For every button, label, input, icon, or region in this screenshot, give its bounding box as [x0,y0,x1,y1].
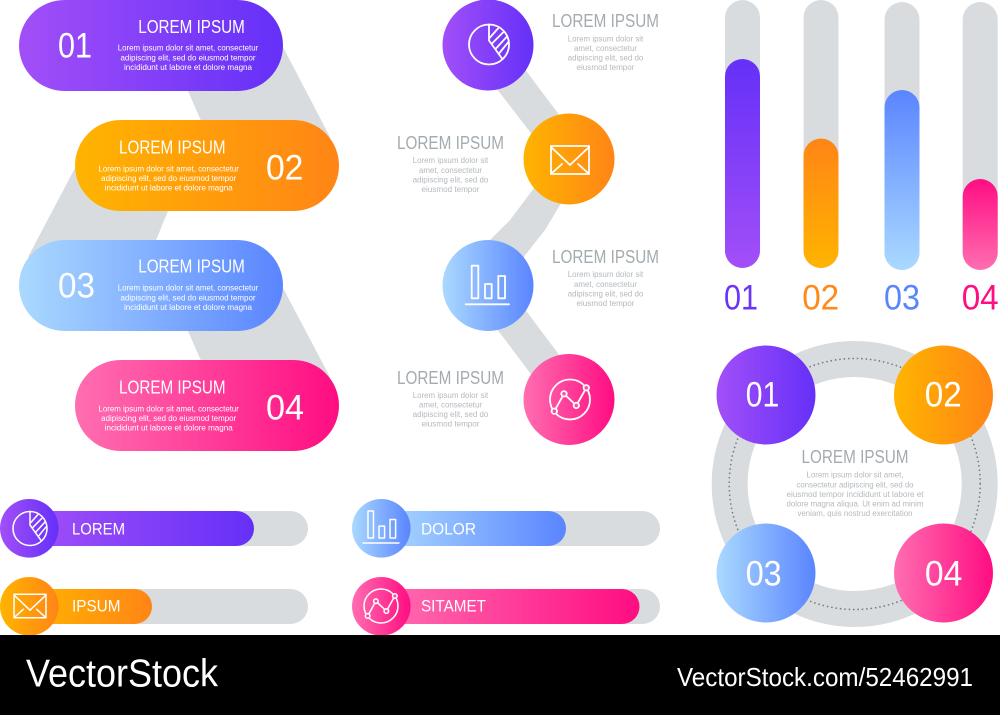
step 1 with pie icon: adipiscing elit, sed do [568,54,644,62]
progress bar DOLOR [352,499,660,558]
node 01: 01 [746,376,779,415]
panel: horizontal progress bars [0,499,660,636]
pill 02: adipiscing elit, sed do eiusmod tempor [101,174,237,183]
panel: circular cycle diagram [716,346,993,622]
step 2 with envelope icon: Lorem ipsum dolor sit [413,156,489,165]
step 4 with line chart icon [397,354,614,445]
bar 01: 01 [724,278,758,317]
pill 03 [19,240,283,331]
centre text: eiusmod tempor incididunt ut labore et [786,490,924,499]
progress bar DOLOR: DOLOR [421,520,476,538]
pill 01: adipiscing elit, sed do eiusmod tempor [120,53,256,62]
progress bar SITAMET: SITAMET [421,596,486,616]
footer band: VectorStock [26,653,218,696]
pill 01: incididunt ut labore et dolore magna [124,63,253,72]
step 1 with pie icon: Lorem ipsum dolor sit [568,34,644,44]
pill 04: incididunt ut labore et dolore magna [105,424,233,433]
bar 03 [884,2,920,317]
pill 03: LOREM IPSUM [138,256,245,276]
node 03: 03 [746,555,782,594]
centre text: dolore magna aliqua. Ut enim ad minim [786,500,924,508]
pill 02: Lorem ipsum dolor sit amet, consectetur [98,164,239,173]
step 3 with bar chart icon: eiusmod tempor [576,299,635,308]
step 3 with bar chart icon: LOREM IPSUM [552,247,659,267]
centre text: LOREM IPSUM [802,447,908,467]
node 02 [894,346,993,444]
pill 02: LOREM IPSUM [119,137,226,157]
pill 04: adipiscing elit, sed do eiusmod tempor [101,414,237,423]
step 2 with envelope icon [397,114,614,204]
centre text: veniam, quis nostrud exercitation [798,509,912,518]
footer band [0,635,1000,715]
grey ring [730,359,980,609]
grey zigzag connector [470,50,575,390]
step 2 with envelope icon: eiusmod tempor [422,185,480,194]
step 3 with bar chart icon [442,240,659,331]
progress bar LOREM [0,499,308,558]
pill 01: Lorem ipsum dolor sit amet, consectetur [118,44,259,53]
centre text: consectetur adipiscing elit, sed do [796,480,914,489]
centre text [786,447,924,518]
pill 01: 01 [58,26,92,66]
node 03 [716,524,816,622]
node 04: 04 [925,555,962,594]
step 4 with line chart icon: Lorem ipsum dolor sit [413,391,489,400]
bar 02 [802,0,839,317]
node 02: 02 [925,376,962,415]
pill 02 [75,120,339,211]
step 3 with bar chart icon: Lorem ipsum dolor sit [568,270,644,279]
bar 01 [724,0,760,317]
step 4 with line chart icon: amet, consectetur [419,400,482,410]
panel: vertical bar chart [724,0,999,317]
node 01 [716,346,816,444]
pill 01: LOREM IPSUM [138,17,245,37]
pill 03: Lorem ipsum dolor sit amet, consectetur [118,284,259,293]
step 1 with pie icon [442,0,659,90]
bar 02: 02 [802,278,839,317]
step 2 with envelope icon: amet, consectetur [419,166,482,175]
pill 02: 02 [266,148,303,187]
step 1 with pie icon: eiusmod tempor [576,63,635,72]
pill 03: adipiscing elit, sed do eiusmod tempor [120,293,256,302]
progress bar SITAMET [352,577,660,636]
footer band: VectorStock.com/52462991 [677,662,973,692]
step 3 with bar chart icon: adipiscing elit, sed do [568,290,644,298]
step 3 with bar chart icon: amet, consectetur [574,280,637,289]
step 1 with pie icon: amet, consectetur [574,44,637,53]
bar 04 [962,2,999,317]
dotted ring [729,358,980,610]
step 2 with envelope icon: LOREM IPSUM [397,133,504,153]
progress bar LOREM: LOREM [72,520,125,538]
pill 04 [75,360,339,451]
bar 04: 04 [962,278,999,317]
panel: stacked pill steps [19,0,339,451]
pill 01 [19,0,283,91]
bar 03: 03 [884,278,920,317]
step 1 with pie icon: LOREM IPSUM [552,11,659,31]
node 04 [894,524,993,622]
progress bar IPSUM: IPSUM [72,596,120,616]
pill 02: incididunt ut labore et dolore magna [105,184,233,193]
pill 03: incididunt ut labore et dolore magna [124,303,253,312]
progress bar IPSUM [0,577,308,636]
grey connector ribbon between pills [28,47,330,390]
step 2 with envelope icon: adipiscing elit, sed do [413,176,489,184]
step 4 with line chart icon: adipiscing elit, sed do [413,410,489,419]
step 4 with line chart icon: LOREM IPSUM [397,368,504,388]
pill 04: Lorem ipsum dolor sit amet, consectetur [98,404,239,413]
step 4 with line chart icon: eiusmod tempor [422,420,480,428]
panel: zigzag icon timeline [397,0,659,445]
pill 03: 03 [58,267,95,306]
centre text: Lorem ipsum dolor sit amet, [806,471,904,480]
pill 04: 04 [266,388,304,427]
pill 04: LOREM IPSUM [119,377,226,397]
